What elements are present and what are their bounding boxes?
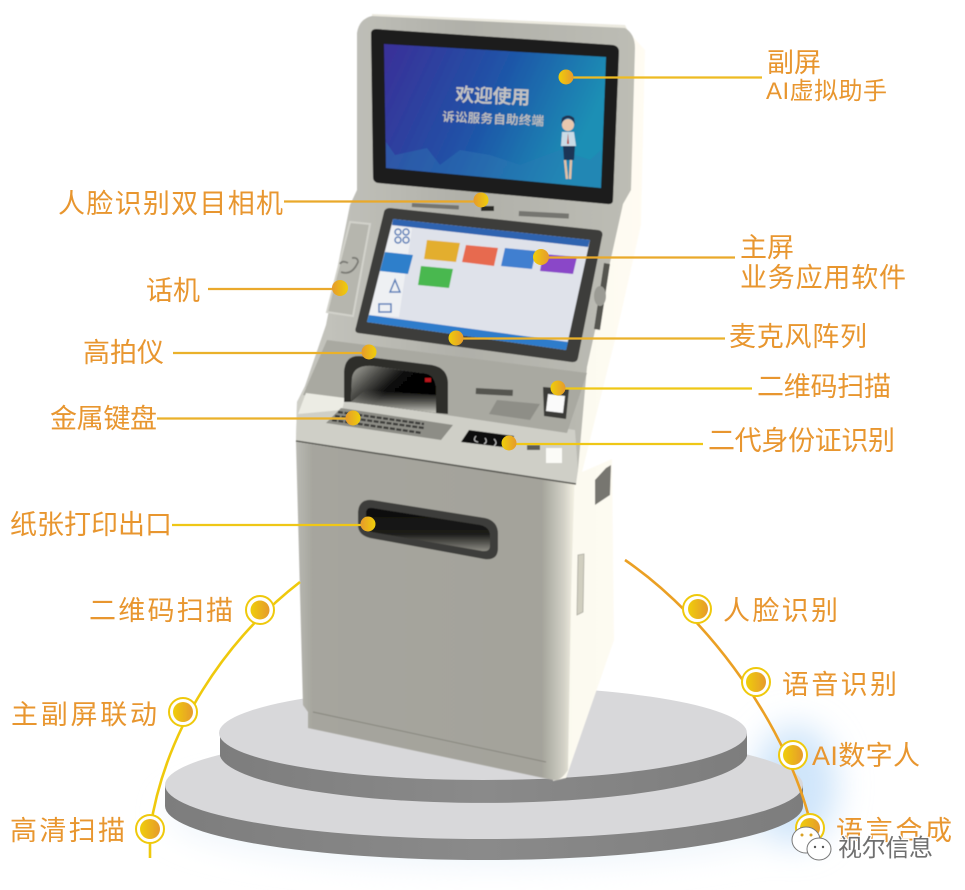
- callout: secondary screen: [558, 70, 762, 84]
- slot and NFC pad: [476, 388, 513, 396]
- label: secondary screen: [766, 48, 887, 105]
- app tile purple: [540, 254, 577, 274]
- callout: binocular camera: [284, 192, 488, 208]
- node: left QR scan: [246, 596, 274, 624]
- paper output slot: [358, 500, 498, 559]
- callout: metal keypad: [157, 410, 360, 426]
- screen title: 欢迎使用: [455, 84, 531, 109]
- sidebar active item: [380, 252, 413, 274]
- QR scanner window: [543, 387, 569, 419]
- node: right AI avatar: [779, 741, 807, 769]
- label: metal keypad: 金属键盘: [50, 404, 157, 434]
- recess wall: [303, 340, 587, 433]
- watermark: text: 视尔信息: [838, 835, 933, 862]
- deck highlight: [298, 393, 345, 414]
- metal keyboard: [326, 408, 453, 440]
- label: main screen: 业务应用软件: [740, 263, 906, 293]
- app tile red: [462, 245, 498, 266]
- label: speech synthesis: 语言合成: [836, 816, 952, 846]
- callout: ID card reader: [502, 436, 703, 450]
- callout: paper output: [172, 516, 376, 532]
- label: HD scan: 高清扫描: [10, 816, 125, 846]
- platform glow: [170, 725, 837, 865]
- label: ID card reader: 二代身份证识别: [708, 426, 895, 456]
- camera strip: [412, 203, 569, 219]
- label: speech recognition: 语音识别: [782, 670, 897, 700]
- main screen bezel: [355, 208, 602, 362]
- label: face recognition: 人脸识别: [723, 596, 838, 626]
- app tile green: [418, 266, 453, 288]
- label: secondary screen: 副屏: [767, 48, 821, 78]
- main screen: [367, 219, 590, 350]
- side handle: [595, 465, 611, 505]
- avatar: [561, 116, 576, 179]
- node: left HD scan: [136, 815, 164, 843]
- label: microphone array: 麦克风阵列: [729, 322, 867, 352]
- upper body face: [296, 16, 635, 484]
- label: left QR scan: 二维码扫描: [89, 596, 233, 626]
- top edge highlight: [372, 14, 635, 45]
- callout: QR scanner: [550, 380, 752, 396]
- label: handset: 话机: [146, 276, 200, 306]
- callout: document camera: [173, 344, 376, 360]
- app tile yellow: [424, 240, 460, 262]
- sidebar icons: [379, 229, 409, 312]
- callout: microphone array: [448, 330, 725, 346]
- ID card reader: [461, 430, 514, 448]
- platform: two-tier round base: [165, 686, 803, 860]
- label: main screen: 主屏: [740, 233, 794, 263]
- base cabinet: [296, 442, 575, 780]
- feature arc: right: [625, 560, 812, 830]
- callout: main screen: [533, 249, 735, 265]
- kiosk side panels: [553, 28, 645, 781]
- label: paper output: 纸张打印出口: [10, 510, 172, 540]
- label: AI avatar: AI数字人: [812, 741, 920, 771]
- card slot right: [594, 263, 610, 330]
- label: secondary screen: AI虚拟助手: [766, 78, 887, 105]
- label: QR scanner: 二维码扫描: [757, 372, 891, 402]
- node: left screen linkage: [169, 698, 197, 726]
- feature arc: left: [150, 582, 300, 858]
- label: document camera: 高拍仪: [83, 338, 164, 368]
- high-shot scanner arch: [344, 356, 448, 414]
- node: right face recognition: [683, 595, 711, 623]
- label: screen linkage: 主副屏联动: [11, 700, 157, 730]
- secondary screen: [384, 44, 606, 188]
- phone panel: [327, 222, 370, 316]
- node: right speech recognition: [742, 668, 770, 696]
- callout: handset: [208, 280, 348, 296]
- label: main screen: [740, 233, 906, 293]
- app tile blue: [501, 248, 536, 269]
- screen subtitle: 诉讼服务自助终端: [442, 109, 545, 128]
- kiosk machine: [296, 14, 645, 781]
- watermark: WeChat icon: [792, 827, 831, 860]
- node: right speech synthesis: [796, 814, 824, 842]
- deck: [296, 388, 578, 484]
- label: binocular camera: 人脸识别双目相机: [58, 189, 283, 219]
- secondary screen bezel: [371, 29, 619, 204]
